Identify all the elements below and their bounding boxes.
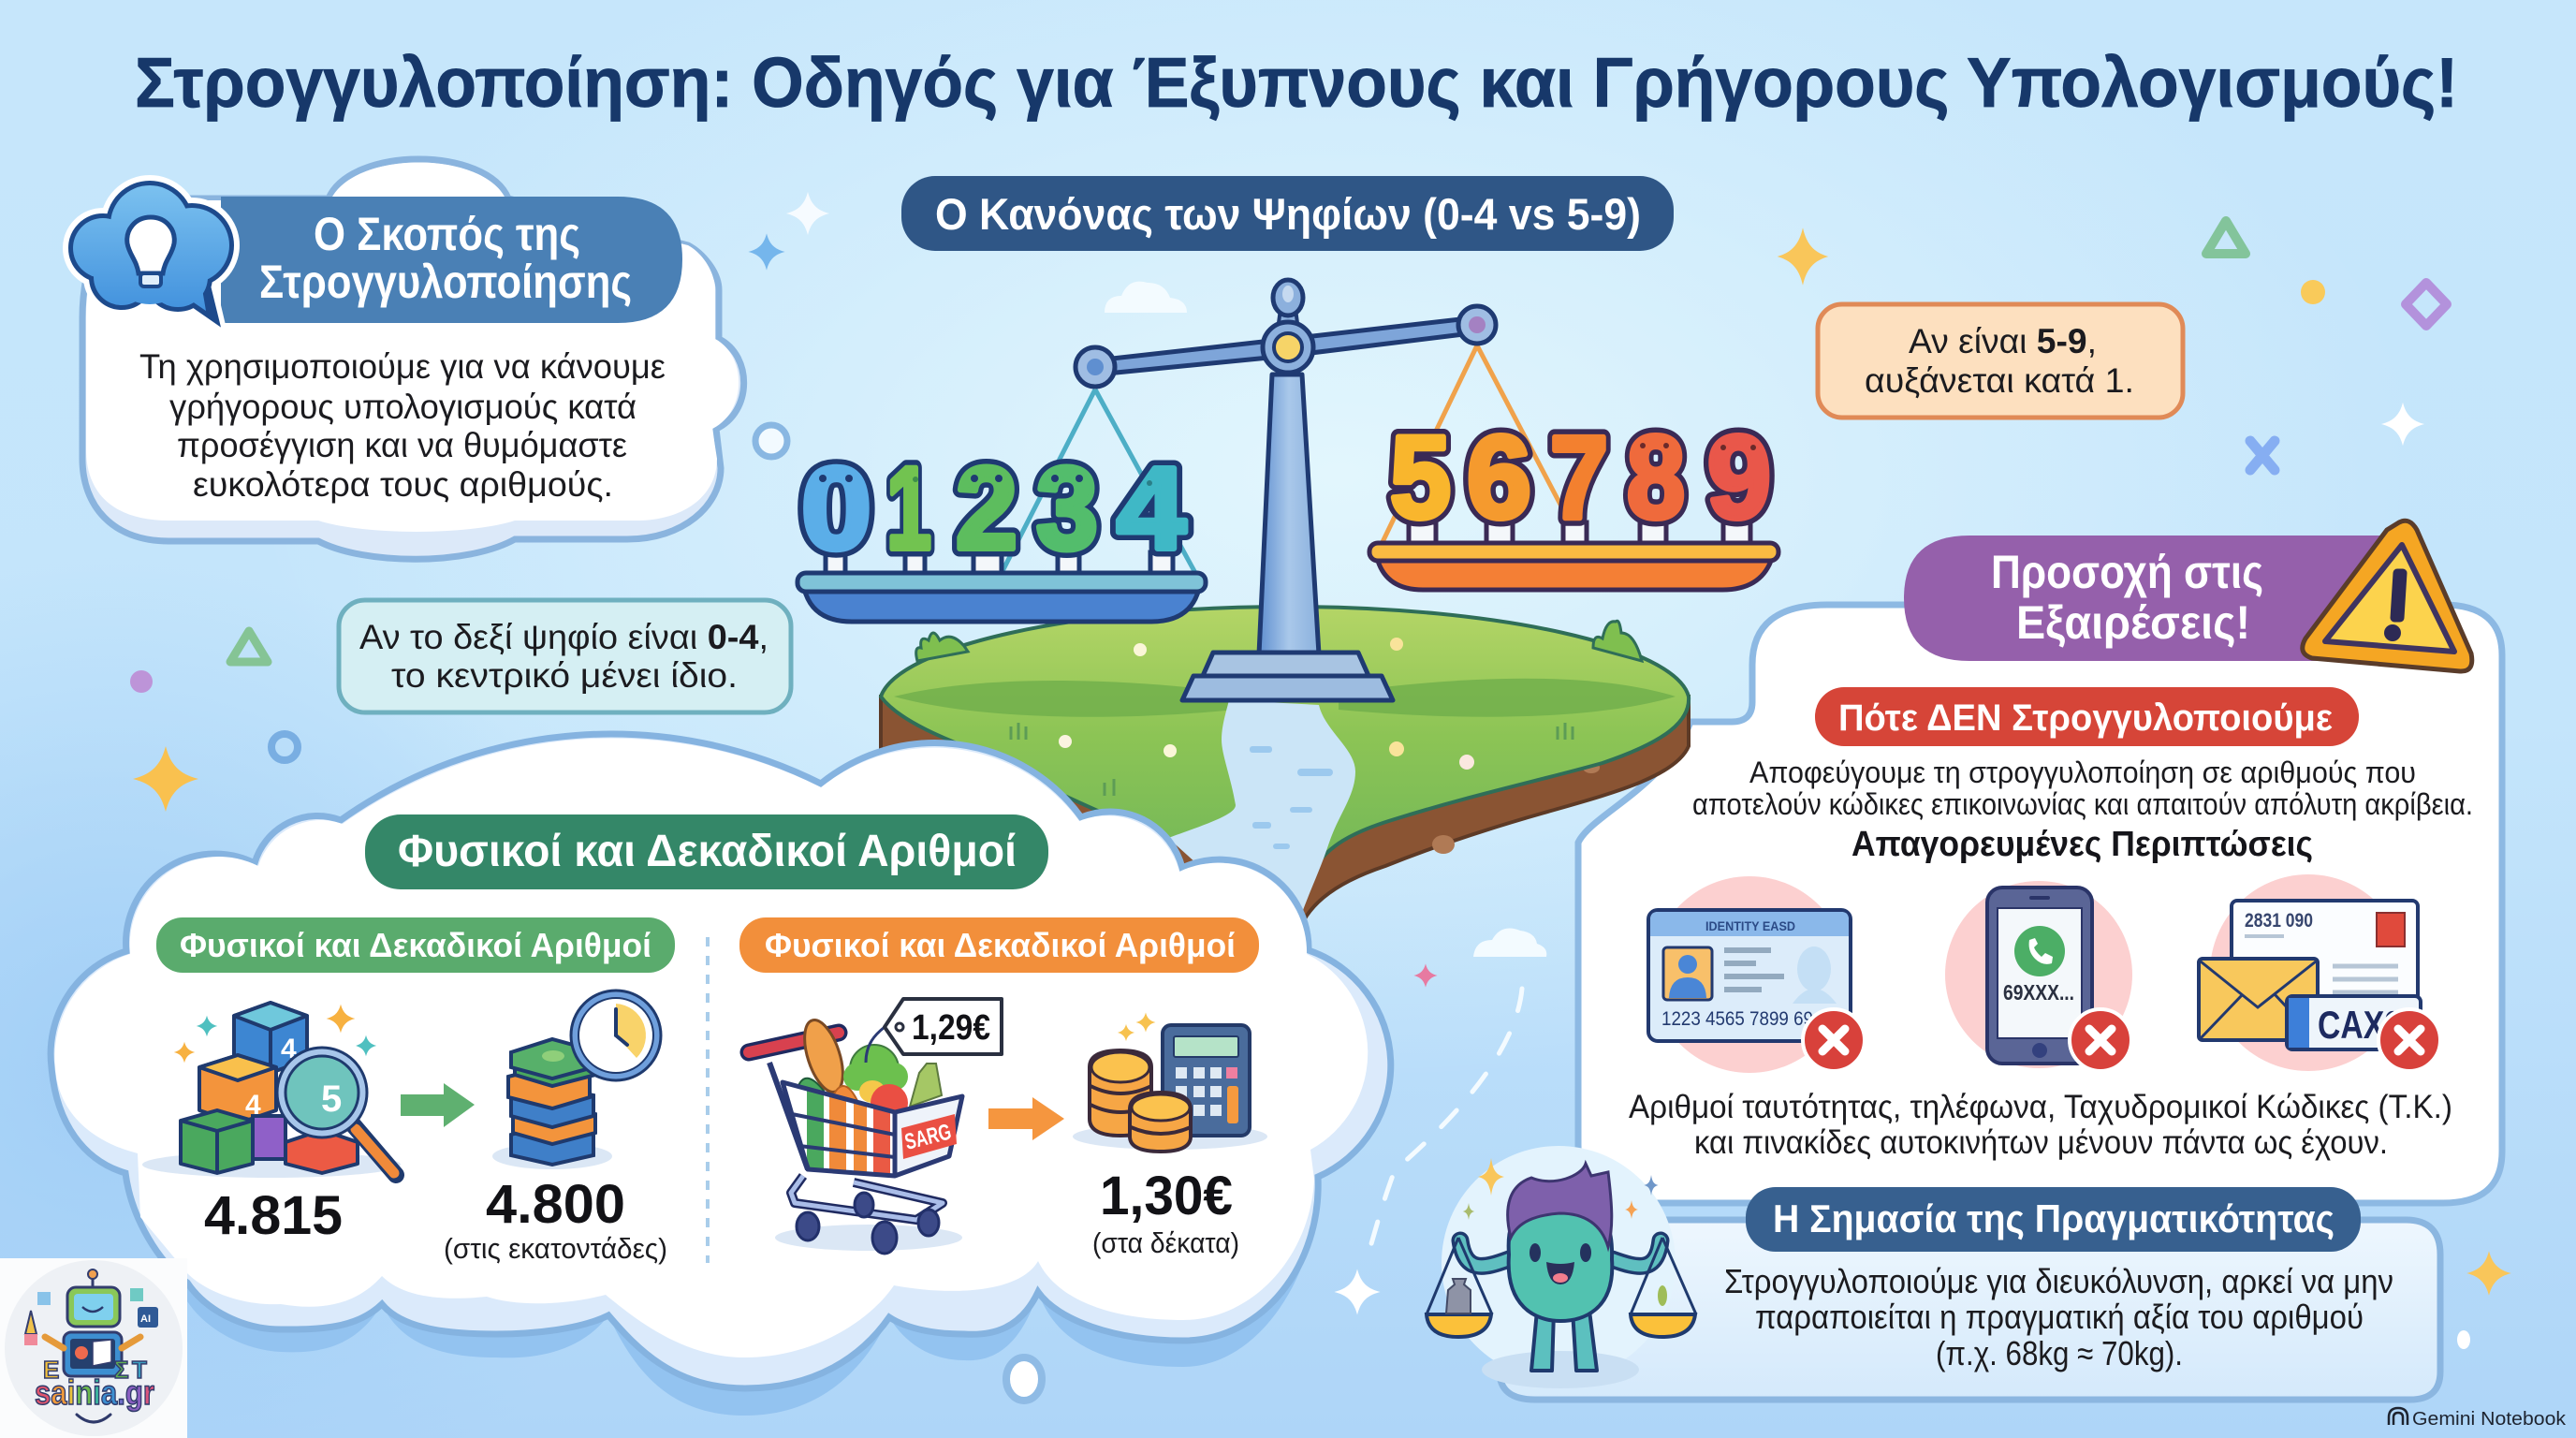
callout: rule 5-9: Αν είναι 5-9,	[1909, 322, 2097, 360]
digits 5-9 outline: 8	[1627, 413, 1685, 543]
purpose header: Ο Σκοπός της	[314, 208, 580, 260]
reality text	[1724, 1262, 2393, 1372]
left pan strings	[1002, 389, 1195, 573]
caption: hundreds: (στις εκατοντάδες)	[444, 1232, 667, 1265]
digits 0-4 outline	[801, 444, 1186, 574]
digits 0-4 fill: 1	[886, 444, 931, 574]
purpose text: ευκολότερα τους αριθμούς.	[193, 465, 613, 504]
title: Στρογγυλοποίηση: Οδηγός για Έξυπνους και Γρήγορους Υπολογισμούς!	[135, 43, 2458, 122]
digits 5-9 outline: 6	[1467, 413, 1531, 543]
decimal sub-header pill: Φυσικοί και Δεκαδικοί Αριθμοί	[765, 926, 1236, 964]
cloud shadow	[187, 1177, 1318, 1416]
exceptions header pill: Εξαιρέσεις!	[2016, 596, 2250, 649]
natural sub-header pill: Φυσικοί και Δεκαδικοί Αριθμοί	[180, 926, 651, 964]
purpose header	[221, 197, 682, 323]
exceptions note	[1629, 1089, 2452, 1161]
icon: stack with clock	[492, 990, 661, 1169]
digits 5-9 fill: 9	[1707, 413, 1771, 543]
decimal sub-header pill	[739, 917, 1259, 973]
exceptions header pill: Προσοχή στις	[1991, 546, 2263, 598]
icon: phone: 69XXX...	[2003, 980, 2074, 1005]
digits 5-9 outline: 9	[1707, 413, 1771, 543]
digits 5-9 fill: 6	[1467, 413, 1531, 543]
icon: identity card	[1648, 876, 1865, 1073]
reality text: Στρογγυλοποιούμε για διευκόλυνση, αρκεί να μην	[1724, 1262, 2393, 1300]
arrow: green	[401, 1083, 475, 1127]
values: 4.815: 4.815	[204, 1185, 343, 1246]
small clouds and dashed path	[1006, 282, 2511, 1401]
never round pill	[1815, 687, 2359, 746]
digits 0-4 fill: 3	[1036, 444, 1098, 574]
right pan	[1369, 543, 1778, 590]
exceptions note: Αριθμοί ταυτότητας, τηλέφωνα, Ταχυδρομικοί Κώδικες (Τ.Κ.)	[1629, 1089, 2452, 1125]
icon: identity card: 1223 4565 7899 69	[1661, 1008, 1813, 1030]
letters: Σ	[114, 1356, 129, 1384]
digits 0-4 outline: 4	[1117, 444, 1186, 574]
panel: exceptions	[1578, 521, 2502, 1203]
values: 1,30€: 1,30€	[1100, 1166, 1233, 1226]
reality header pill: Η Σημασία της Πραγματικότητας	[1773, 1196, 2334, 1240]
callout: rule 5-9: αυξάνεται κατά 1.	[1865, 361, 2134, 400]
digit legs: left	[826, 552, 1173, 575]
exceptions description	[1692, 756, 2473, 821]
digits 0-4 fill: 2	[956, 444, 1017, 574]
digits 5-9 outline: 7	[1550, 413, 1608, 543]
icon: warning triangle	[2303, 521, 2472, 671]
icon: shopping cart	[749, 1016, 962, 1254]
icon: light bulb cloud	[73, 185, 229, 318]
digits 5-9 fill: 5	[1390, 413, 1451, 543]
floating island	[881, 607, 1689, 936]
purpose text: Τη χρησιμοποιούμε για να κάνουμε	[139, 347, 666, 386]
reality header pill	[1746, 1187, 2361, 1252]
purpose header: Στρογγυλοποίησης	[259, 256, 632, 308]
natural sub-header pill	[156, 917, 675, 973]
digits 0-4 fill: 0	[801, 444, 871, 574]
digits 5-9 fill: 7	[1550, 413, 1608, 543]
logo: sainia.gr	[0, 1258, 187, 1438]
price tag: 1,29€	[912, 1008, 990, 1048]
arrow: orange	[988, 1097, 1064, 1140]
reality text: παραποιείται η πραγματική αξία του αριθμού	[1755, 1298, 2364, 1336]
left pan	[798, 573, 1206, 622]
purpose text: προσέγγιση και να θυμόμαστε	[177, 426, 627, 464]
logo wordmark: sainia.gr	[35, 1373, 154, 1412]
callout: rule 0-4: Αν το δεξί ψηφίο είναι 0-4,	[359, 618, 768, 656]
icon: letter, envelope and plate: CAX2	[2318, 1003, 2402, 1047]
cloud outline	[51, 734, 1391, 1388]
digit faces	[819, 443, 1756, 486]
watermark: Gemini Notebook	[2412, 1409, 2567, 1430]
forbidden cases heading: Απαγορευμένες Περιπτώσεις	[1852, 825, 2313, 864]
main header pill	[365, 814, 1048, 889]
digits 0-4 outline: 2	[956, 444, 1017, 574]
icon: identity card: IDENTITY EASD	[1705, 918, 1795, 933]
digits 0-4 fill	[801, 444, 1186, 574]
post and base	[1182, 374, 1393, 700]
exceptions description: Αποφεύγουμε τη στρογγυλοποίηση σε αριθμούς που	[1749, 756, 2416, 789]
caption: tenths: (στα δέκατα)	[1092, 1226, 1239, 1259]
river	[1168, 700, 1355, 913]
letters	[43, 1356, 147, 1384]
robot: AI	[140, 1313, 151, 1325]
icon: letter, envelope and plate: 2831 090	[2245, 910, 2313, 932]
never round pill: Πότε ΔΕΝ Στρογγυλοποιούμε	[1838, 697, 2333, 739]
character with scales	[1427, 1146, 1696, 1388]
icon: coins and calculator	[1073, 1013, 1267, 1152]
beam	[1076, 280, 1496, 387]
robot	[24, 1269, 158, 1376]
decorative shapes: top right	[1778, 221, 2447, 470]
digit legs: right	[1409, 522, 1750, 545]
decorative shapes: left	[130, 192, 829, 812]
main header pill: Φυσικοί και Δεκαδικοί Αριθμοί	[398, 827, 1017, 876]
digits 0-4 outline: 1	[886, 444, 931, 574]
letters: Ε	[43, 1356, 59, 1384]
price tag	[885, 999, 1002, 1054]
digits 0-4 fill: 4	[1117, 444, 1186, 574]
icon: shopping cart: SARG	[902, 1120, 954, 1155]
letters: Τ	[132, 1356, 147, 1384]
digits 0-4 outline: 3	[1036, 444, 1098, 574]
icon: number blocks with magnifier: 4	[245, 1090, 261, 1121]
purpose text	[139, 347, 666, 504]
panel: purpose cloud	[73, 159, 744, 559]
callout: rule 5-9	[1818, 304, 2183, 418]
digits 5-9 outline: 5	[1390, 413, 1451, 543]
icon: letter, envelope and plate	[2199, 874, 2440, 1071]
purpose text: γρήγορους υπολογισμούς κατά	[169, 388, 637, 426]
rule header: Ο Κανόνας των Ψηφίων (0-4 vs 5-9)	[935, 189, 1641, 239]
digits 5-9 outline	[1390, 413, 1771, 543]
exceptions header pill	[1904, 536, 2415, 661]
panel: importance of reality	[1500, 1187, 2440, 1400]
cloud white body	[54, 739, 1368, 1357]
rule header	[901, 176, 1674, 251]
balance scale	[798, 280, 1778, 700]
digits 5-9 fill	[1390, 413, 1771, 543]
reality text: (π.χ. 68kg ≈ 70kg).	[1936, 1334, 2183, 1372]
icon: number blocks with magnifier: 4	[281, 1034, 297, 1064]
icon: phone	[1945, 881, 2132, 1071]
icon: number blocks with magnifier: 5	[321, 1078, 342, 1120]
callout: rule 0-4	[339, 600, 791, 712]
digits 5-9 fill: 8	[1627, 413, 1685, 543]
panel: natural and decimal numbers cloud	[51, 734, 1391, 1416]
values: 4.800: 4.800	[486, 1174, 625, 1235]
exceptions description: αποτελούν κώδικες επικοινωνίας και απαιτούν απόλυτη ακρίβεια.	[1692, 787, 2473, 821]
callout: rule 0-4: το κεντρικό μένει ίδιο.	[391, 656, 738, 695]
exceptions note: και πινακίδες αυτοκινήτων μένουν πάντα ως έχουν.	[1694, 1124, 2388, 1161]
digits 0-4 outline: 0	[801, 444, 871, 574]
right pan strings	[1383, 345, 1580, 542]
icon: number blocks with magnifier	[142, 1003, 401, 1178]
